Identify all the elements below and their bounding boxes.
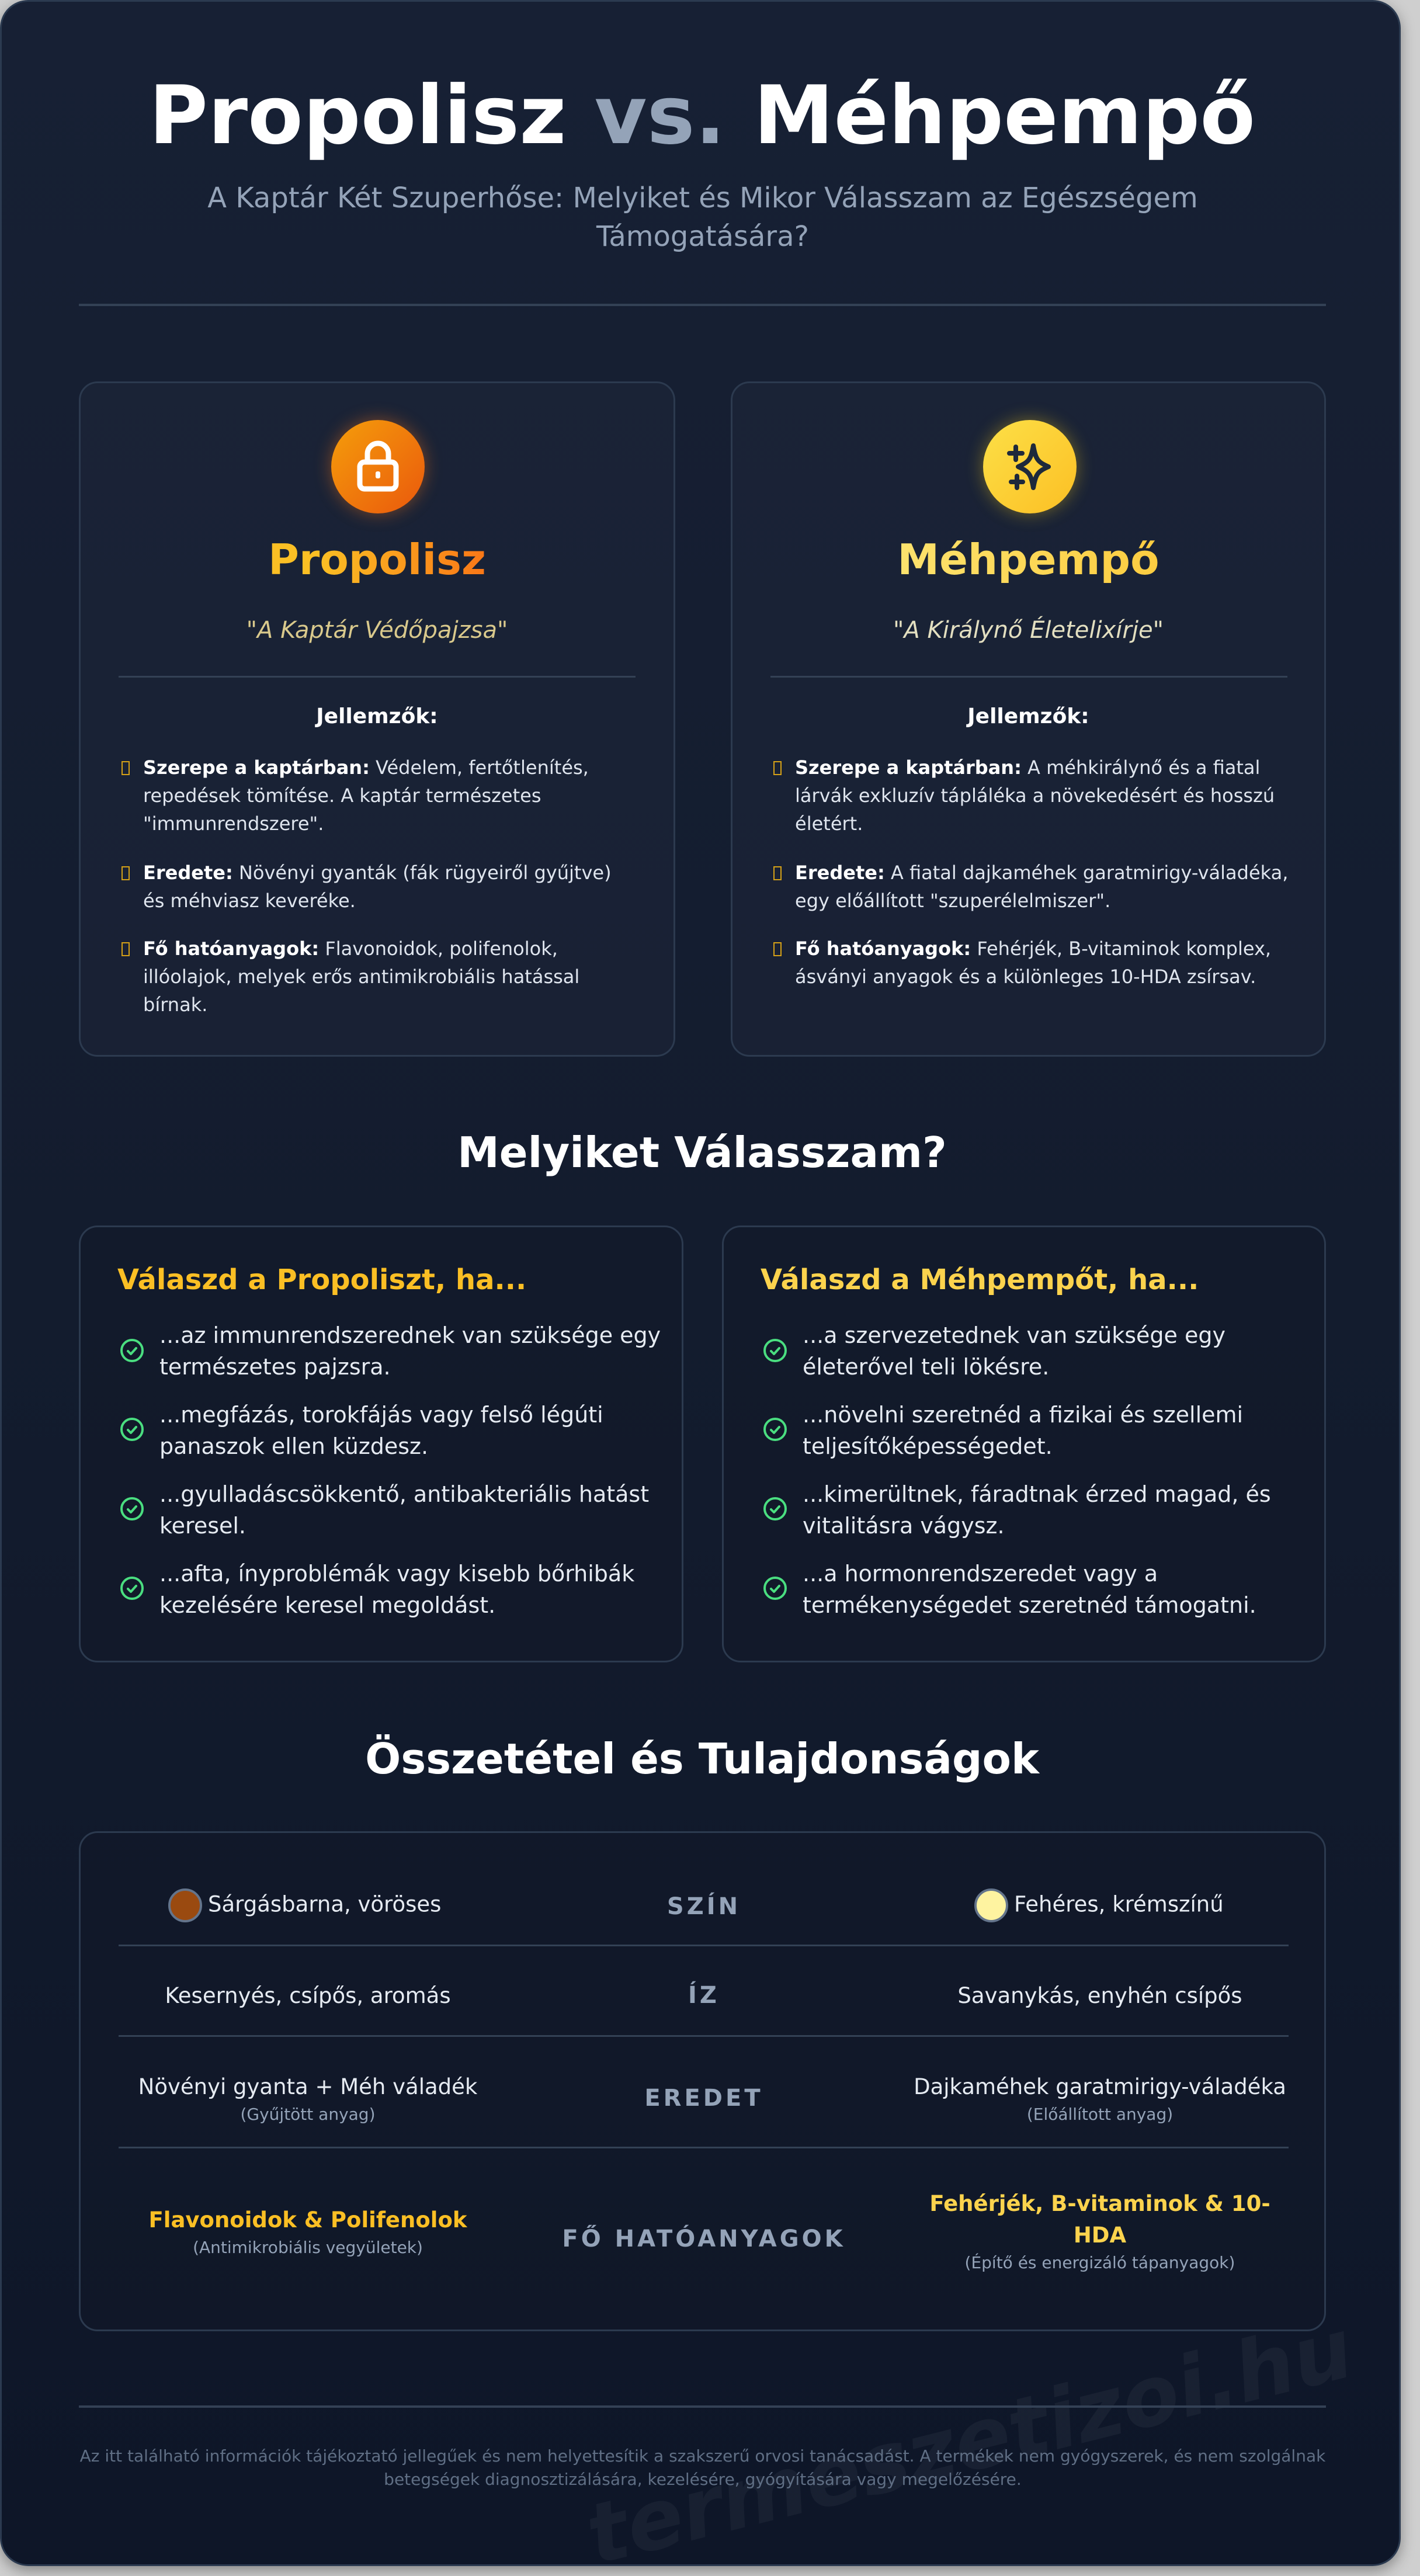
row: szín: [168, 1888, 1224, 1922]
tagline: "A Királynő Életelixírje": [893, 617, 1164, 644]
row: íz: ÍZ: [688, 1982, 720, 2009]
row: eredet: [138, 2074, 1286, 2124]
list: jellemzők: [121, 704, 612, 1016]
list: jellemzők: Jellemzők:: [967, 704, 1089, 728]
row: eredet: (Gyűjtött anyag): [240, 2105, 375, 2124]
panel: choose propolisz: ...afta, ínyproblémák vagy kisebb bőrhibák kezelésére keresel megoldást.: [159, 1561, 634, 1618]
row: szín: Fehéres, krémszínű: [1014, 1891, 1224, 1917]
row: fő hatóanyagok: Flavonoidok & Polifenolok: [148, 2207, 467, 2233]
footer disclaimer: Az itt található információk tájékoztató jellegűek és nem helyettesítik a szakszerű orvosi tanácsadást. A termékek nem gyógyszerek, és nem szolgálnak betegségek diagnosztizálására, kezelésére, gyógyítására vagy megelőzésére.: [80, 2446, 1325, 2489]
title: Propolisz vs. Méhpempő: [149, 68, 1255, 162]
list: jellemzők: Fő hatóanyagok: Fehérjék, B-vitaminok komplex, ásványi anyagok és a különleges 10-HDA zsírsav.: [795, 938, 1271, 988]
list: jellemzők: Fő hatóanyagok: Flavonoidok, polifenolok, illóolajok, melyek erős antimikrobiális hatással bírnak.: [143, 938, 579, 1016]
comparison table: [79, 1831, 1326, 2331]
list: jellemzők: Szerepe a kaptárban: A méhkirálynő és a fiatal lárvák exkluzív tápláléka a növekedésért és hosszú életért.: [795, 756, 1275, 835]
row: fő hatóanyagok: (Építő és energizáló tápanyagok): [965, 2253, 1235, 2272]
panel: propolisz: [79, 381, 675, 1057]
row: szín: SZÍN: [667, 1893, 741, 1920]
list: jellemzők: [773, 704, 1288, 988]
list: jellemzők: Jellemzők:: [316, 704, 438, 728]
panel: choose propolisz: ...gyulladáscsökkentő, antibakteriális hatást keresel.: [159, 1481, 649, 1539]
heading: Összetétel és Tulajdonságok: Összetétel és Tulajdonságok: [365, 1734, 1039, 1783]
row: fő hatóanyagok: HDA: [1074, 2223, 1126, 2248]
heading: Méhpempő: Méhpempő: [897, 535, 1159, 584]
row: eredet: EREDET: [644, 2085, 763, 2112]
panel: choose méhpempő: ...a szervezetednek van szüksége egy életerővel teli lökésre.: [803, 1322, 1225, 1380]
panel: choose propolisz: [79, 1225, 683, 1662]
row: íz: [165, 1981, 1242, 2009]
row: fő hatóanyagok: [148, 2191, 1270, 2272]
panel: choose propolisz: Válaszd a Propoliszt, ha...: [117, 1263, 526, 1296]
list: jellemzők: Eredete: Növényi gyanták (fák rügyeiről gyűjtve) és méhviasz keveréke.: [143, 862, 612, 912]
panel: choose méhpempő: Válaszd a Méhpempőt, ha...: [761, 1263, 1199, 1296]
panel: choose méhpempő: ...növelni szeretnéd a fizikai és szellemi teljesítőképességedet.: [803, 1402, 1243, 1459]
panel: choose méhpempő: [722, 1225, 1326, 1662]
heading: Méhpempő: [732, 533, 1324, 586]
panel: choose propolisz: ...az immunrendszerednek van szüksége egy természetes pajzsra.: [159, 1322, 661, 1380]
row: íz: Savanykás, enyhén csípős: [957, 1983, 1242, 2008]
heading: Propolisz: Propolisz: [268, 535, 486, 584]
panel: choose méhpempő: ...a hormonrendszeredet vagy a termékenységedet szeretnéd támogatni.: [803, 1561, 1256, 1618]
row: fő hatóanyagok: Fehérjék, B-vitaminok & 10-: [929, 2191, 1270, 2216]
row: fő hatóanyagok: (Antimikrobiális vegyületek): [193, 2238, 423, 2257]
subtitle: A Kaptár Két Szuperhőse: Melyiket és Mikor Válasszam az Egészségem Támogatására?: [207, 182, 1198, 253]
row: szín: Sárgásbarna, vöröses: [208, 1891, 441, 1917]
icon: lock: [331, 420, 425, 513]
panel: choose méhpempő: ...kimerültnek, fáradtnak érzed magad, és vitalitásra vágysz.: [803, 1481, 1271, 1539]
list: jellemzők: Szerepe a kaptárban: Védelem, fertőtlenítés, repedések tömítése. A kaptár természetes "immunrendszere".: [143, 756, 589, 835]
tagline: "A Kaptár Védőpajzsa": [246, 617, 508, 644]
row: fő hatóanyagok: FŐ HATÓANYAGOK: [562, 2226, 846, 2252]
list: jellemzők: Eredete: A fiatal dajkaméhek garatmirigy-váladéka, egy előállított "szuperélelmiszer".: [795, 862, 1288, 912]
panel: choose propolisz: ...megfázás, torokfájás vagy felső légúti panaszok ellen küzdesz.: [159, 1402, 603, 1459]
heading: Melyiket Válasszam?: Melyiket Válasszam?: [457, 1128, 947, 1177]
row: eredet: Dajkaméhek garatmirigy-váladéka: [914, 2074, 1286, 2099]
row: íz: Kesernyés, csípős, aromás: [165, 1983, 451, 2008]
panel: méhpempő: [731, 381, 1326, 1057]
row: eredet: Növényi gyanta + Méh váladék: [138, 2074, 477, 2099]
heading: Propolisz: [81, 533, 673, 586]
icon: sparkles: [983, 420, 1077, 513]
row: eredet: (Előállított anyag): [1027, 2105, 1173, 2124]
